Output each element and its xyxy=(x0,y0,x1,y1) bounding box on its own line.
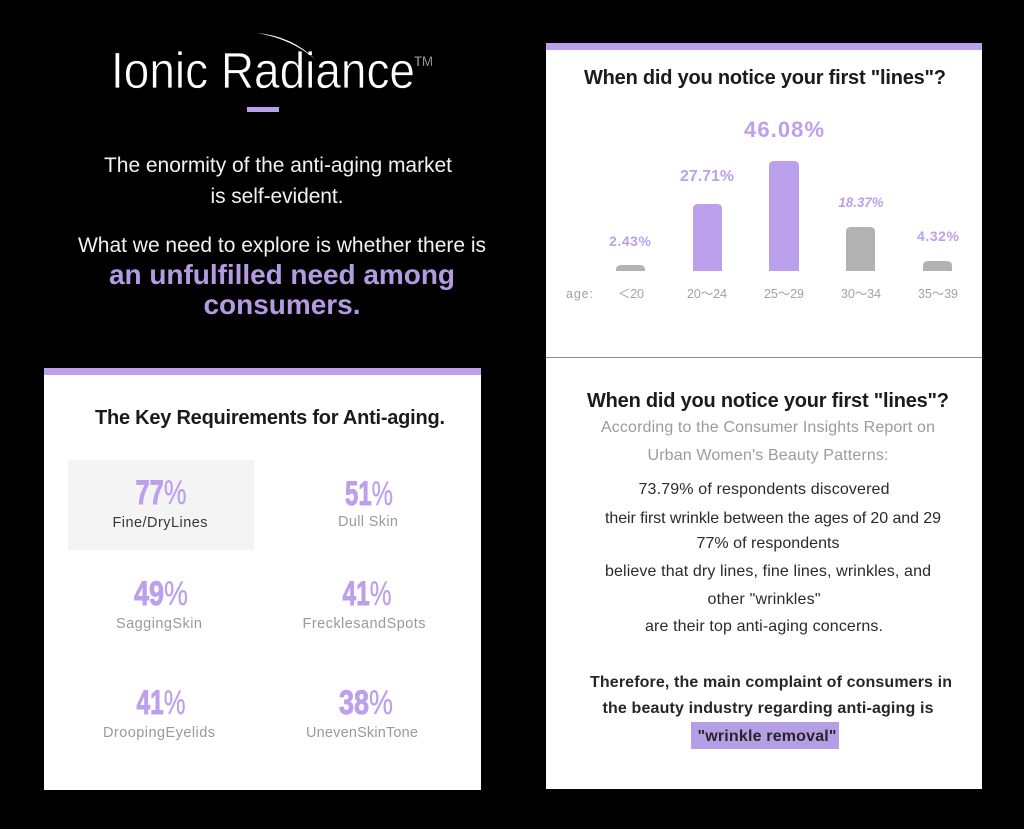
stat: 41% freckles and spots xyxy=(302,575,426,632)
intro text: The enormity of the anti-aging market xyxy=(104,154,452,177)
source note: Urban Women's Beauty Patterns: xyxy=(648,447,888,464)
intro text: an unfulfilled need among xyxy=(109,259,455,290)
findings text: believe that dry lines, fine lines, wrinkles, and xyxy=(605,563,931,580)
stat: 41% freckles and spots: 41% xyxy=(342,575,392,613)
stat: 77% fine/dry lines: Fine/DryLines xyxy=(112,515,208,531)
heading: analysis: When did you notice your first "lines"? xyxy=(587,390,949,412)
bar: 35-39: 35～39 xyxy=(918,287,958,301)
heading: key requirements: The Key Requirements for Anti-aging. xyxy=(95,407,445,429)
stat: 41% freckles and spots: FrecklesandSpots xyxy=(302,616,426,632)
findings text: their first wrinkle between the ages of 20 and 29 xyxy=(605,510,941,527)
findings text: are their top anti-aging concerns. xyxy=(645,618,883,635)
panel: first lines chart xyxy=(546,43,982,357)
stat: 49% sagging skin xyxy=(116,575,202,632)
logo: Ionic Radiance: Ionic Radiance xyxy=(111,42,415,99)
bar: 30-34: 30～34 xyxy=(841,287,881,301)
conclusion text xyxy=(590,674,952,749)
conclusion text: the beauty industry regarding anti-aging is xyxy=(602,700,934,717)
intro text: consumers. xyxy=(204,289,360,320)
highlight: wrinkle removal xyxy=(691,722,839,749)
logo: Ionic Radiance: TM xyxy=(414,53,433,69)
bar: under 20: 2.43% xyxy=(609,233,652,249)
stat: 49% sagging skin: 49% xyxy=(134,575,188,613)
axis label: age: age: xyxy=(566,287,593,301)
stat: 38% uneven skin tone: UnevenSkinTone xyxy=(306,725,418,741)
stat: 49% sagging skin: SaggingSkin xyxy=(116,616,202,632)
source note xyxy=(601,419,935,464)
stat: 51% dull skin xyxy=(338,475,398,530)
stat: 41% drooping eyelids: DroopingEyelids xyxy=(103,725,215,741)
findings text: 77% of respondents xyxy=(696,535,840,552)
intro text: is self-evident. xyxy=(210,185,344,208)
bar: 35-39 xyxy=(917,228,960,301)
bar: 20-24 xyxy=(680,168,734,301)
intro text xyxy=(78,154,486,320)
divider between right panels xyxy=(546,357,982,358)
bar: 20-24: 20～24 xyxy=(687,287,727,301)
bar: under 20: ＜20 xyxy=(618,287,644,301)
bar chart xyxy=(566,117,960,301)
source note: According to the Consumer Insights Report on xyxy=(601,419,935,436)
findings text: other "wrinkles" xyxy=(708,591,820,608)
findings text: 73.79% of respondents discovered xyxy=(638,481,890,498)
bar: 30-34: 18.37% xyxy=(838,194,884,210)
intro text: What we need to explore is whether there is xyxy=(78,234,486,257)
highlight: wrinkle removal: "wrinkle removal" xyxy=(698,728,836,745)
heading: chart: When did you notice your first "lines"? xyxy=(584,67,946,89)
stat: 41% drooping eyelids: 41% xyxy=(136,684,186,722)
stat: 38% uneven skin tone xyxy=(306,684,418,741)
bar: 30-34 xyxy=(838,194,884,301)
highlighted cell background xyxy=(68,460,254,550)
logo accent bar xyxy=(247,107,279,112)
findings text xyxy=(605,481,941,635)
stat: 77% fine/dry lines xyxy=(112,474,208,531)
stat: 51% dull skin: Dull Skin xyxy=(338,514,398,530)
stat: 38% uneven skin tone: 38% xyxy=(339,684,393,722)
bar: under 20 xyxy=(609,233,652,301)
bar: 35-39: 4.32% xyxy=(917,228,960,244)
bar: 25-29: 46.08% xyxy=(744,117,824,142)
panel: key requirements xyxy=(44,368,481,790)
conclusion text: Therefore, the main complaint of consumers in xyxy=(590,674,952,691)
bar: 20-24: 27.71% xyxy=(680,168,734,185)
stat: 51% dull skin: 51% xyxy=(345,475,393,513)
bar: 25-29: 25～29 xyxy=(764,287,804,301)
stat: 77% fine/dry lines: 77% xyxy=(136,474,186,512)
bar: 25-29 xyxy=(744,117,824,301)
stat: 41% drooping eyelids xyxy=(103,684,215,741)
panel: first lines analysis xyxy=(546,358,982,789)
